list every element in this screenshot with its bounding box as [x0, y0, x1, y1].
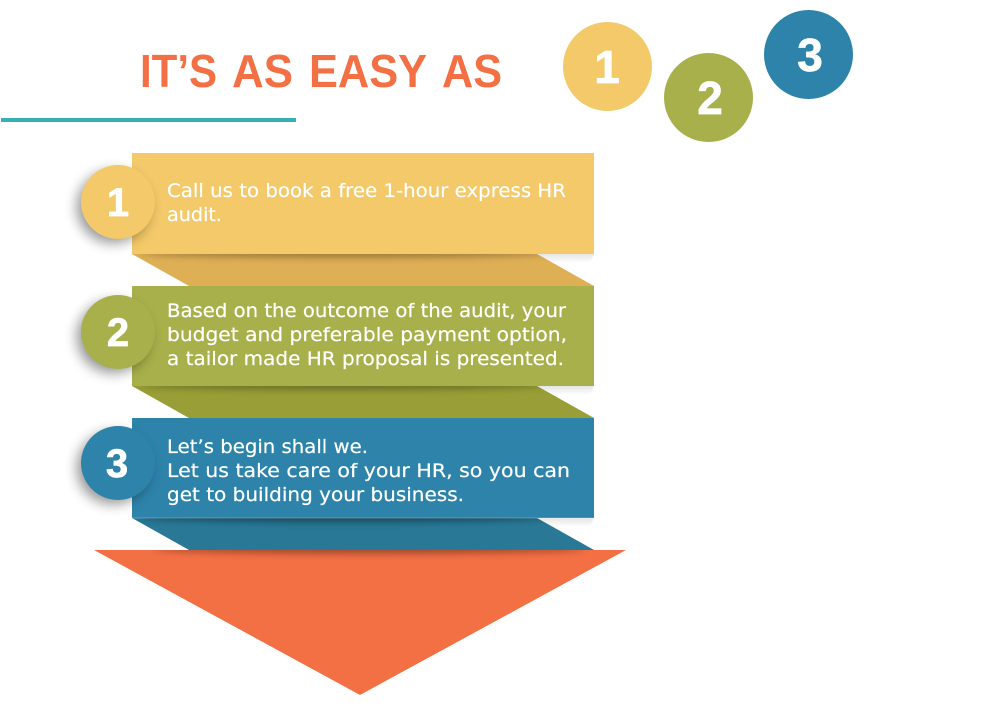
fold: blue to arrow: [132, 518, 594, 550]
badge 1: [563, 22, 652, 111]
step 3 text: [167, 436, 570, 506]
badge 2: [664, 53, 753, 142]
title underline: [1, 118, 296, 122]
step number 2: 2: [107, 311, 129, 355]
step 3 text: Let’s begin shall we.: [167, 436, 368, 458]
step 2 text: a tailor made HR proposal is presented.: [167, 348, 564, 370]
step 1 text: audit.: [167, 204, 222, 226]
step 3 text: Let us take care of your HR, so you can: [167, 460, 570, 482]
badge 3: [764, 10, 853, 99]
step 1 text: Call us to book a free 1-hour express HR: [167, 180, 566, 202]
arrow head: [94, 544, 626, 695]
panel: step 2: [132, 286, 594, 386]
badge 3: 3: [797, 29, 823, 81]
panel: step 3: [132, 418, 594, 518]
step 2 text: [167, 300, 567, 370]
step number 3: [77, 426, 155, 504]
badge 1: 1: [594, 41, 620, 93]
badge 2: 2: [697, 72, 723, 124]
title: AS: [232, 45, 293, 97]
fold: green to blue: [132, 386, 594, 418]
title: AS: [442, 45, 502, 97]
title: IT’S: [140, 45, 217, 97]
step 2 text: Based on the outcome of the audit, your: [167, 300, 566, 322]
title: [140, 45, 502, 97]
step number 2: [77, 295, 155, 373]
fold: yellow to green: [132, 254, 594, 286]
title: EASY: [309, 45, 427, 97]
step 3 text: get to building your business.: [167, 484, 464, 506]
step number 1: [77, 165, 155, 243]
step 1 text: [167, 180, 566, 226]
step number 1: 1: [107, 181, 129, 225]
step number 3: 3: [106, 442, 128, 486]
panel: step 1: [132, 153, 594, 254]
step 2 text: budget and preferable payment option,: [167, 324, 567, 346]
